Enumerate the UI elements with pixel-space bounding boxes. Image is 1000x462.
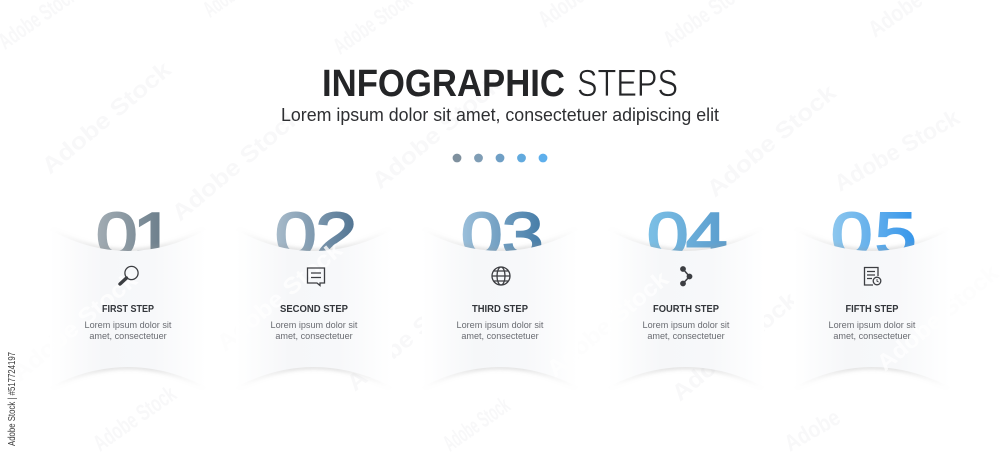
number 05: 05 [831, 200, 916, 270]
step heading: THIRD STEP [472, 304, 528, 315]
title: STEPS [577, 63, 678, 105]
step text: amet, consectetuer [647, 331, 725, 341]
step text: Lorem ipsum dolor sit [457, 320, 544, 330]
panel: fifth step: Adobe Stock [872, 259, 1000, 376]
watermark pattern: Adobe [780, 404, 844, 456]
icon: share nodes [680, 266, 692, 286]
watermark pattern: Adobe Stock [542, 265, 673, 382]
watermark pattern: Adobe Stock [872, 259, 1000, 376]
panel: third step [422, 200, 578, 387]
subtitle: Lorem ipsum dolor sit amet, consectetuer adipiscing elit [281, 105, 719, 125]
stock credit: Adobe Stock | #517724197 [6, 352, 18, 446]
panel: fourth step [542, 200, 764, 387]
step text: amet, consectetuer [275, 331, 353, 341]
watermark pattern: Adobe Stock [438, 392, 514, 456]
step heading: SECOND STEP [280, 304, 348, 315]
watermark pattern: Adobe Stock [167, 103, 306, 226]
step text: amet, consectetuer [89, 331, 167, 341]
panel: first step [7, 200, 206, 387]
watermark pattern: Adobe Stock [830, 104, 964, 196]
step text: amet, consectetuer [461, 331, 539, 341]
panel: second step [212, 200, 392, 387]
panel: fifth step [794, 200, 1000, 387]
icon: magnifier [120, 266, 138, 284]
step heading: FIFTH STEP [846, 304, 899, 315]
number 01: 01 [96, 200, 174, 270]
step text: Lorem ipsum dolor sit [271, 320, 358, 330]
step text: Lorem ipsum dolor sit [643, 320, 730, 330]
panel: second step: Adobe Stock [212, 236, 347, 356]
step heading: FIRST STEP [102, 304, 154, 315]
watermark pattern: Adobe Stock [7, 266, 142, 386]
panel: first step: Adobe Stock [7, 266, 142, 386]
panel: fourth step: Adobe Stock [542, 265, 673, 382]
title: INFOGRAPHIC [322, 63, 565, 105]
step text: amet, consectetuer [833, 331, 911, 341]
watermark pattern: Adobe Stock [212, 236, 347, 356]
watermark pattern: Adobe Stock [37, 56, 176, 179]
watermark pattern: Adobe Stock [367, 71, 506, 194]
number 04: 04 [647, 200, 727, 270]
watermark pattern: Adobe Stock [667, 286, 802, 406]
step text: Lorem ipsum dolor sit [829, 320, 916, 330]
icon: document with clock [864, 268, 881, 285]
step text: Lorem ipsum dolor sit [85, 320, 172, 330]
number 02: 02 [275, 200, 357, 270]
watermark pattern: Adobe Stock [342, 276, 477, 396]
watermark pattern: Adobe Stock [88, 380, 181, 456]
number 03: 03 [461, 200, 543, 270]
icon: speech bubble [308, 268, 324, 286]
progress dots [453, 154, 547, 162]
step heading: FOURTH STEP [653, 304, 719, 315]
icon: globe [492, 267, 510, 285]
watermark pattern: Adobe Stock [702, 79, 841, 202]
